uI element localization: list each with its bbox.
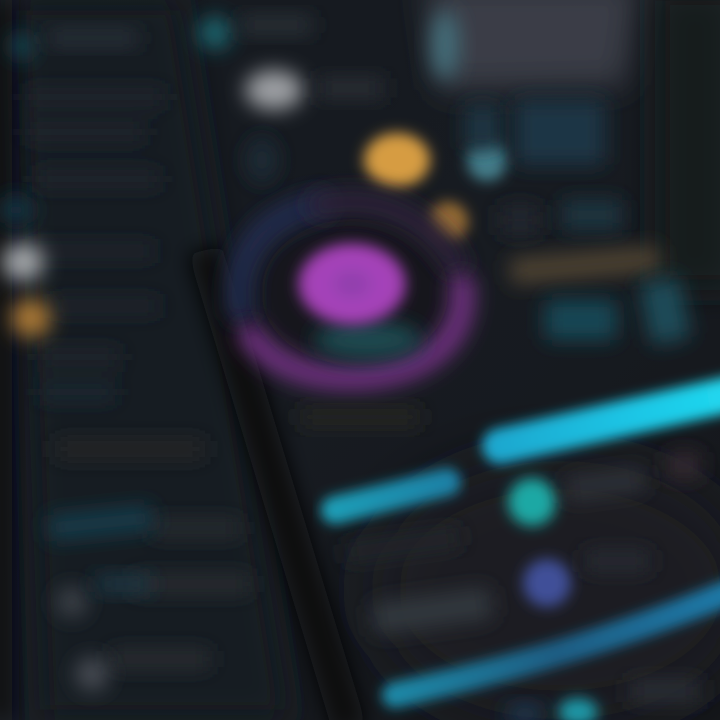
icon: teal small mark [0, 196, 34, 224]
icon: teal bottom dot [558, 698, 598, 720]
panel: left column [0, 0, 290, 720]
icon: teal dot header [10, 34, 34, 58]
icon: gray dot lower left [56, 586, 88, 618]
cyan highlight bar [500, 392, 720, 446]
panel: top right gray [425, 0, 640, 90]
top header items [199, 10, 459, 184]
teal bar lower left [47, 505, 154, 541]
divider: dark diagonal strip [205, 250, 350, 720]
donut left arc [239, 205, 320, 310]
icon: orange dot [11, 299, 51, 337]
blue bottom bar [395, 588, 720, 695]
label bar beside blue circle [585, 550, 650, 572]
label bar beside teal circle [564, 467, 646, 501]
left text bars [25, 90, 250, 668]
icon: teal dot top [199, 17, 231, 49]
panel: top right dark edge [655, 0, 720, 290]
white label [245, 70, 303, 110]
icon: blue circle [523, 559, 571, 607]
gray label [318, 78, 383, 98]
blue bottom mark [505, 705, 545, 720]
panel: lower right [370, 460, 720, 720]
panel: teal stats right [465, 100, 622, 235]
donut top arc [320, 201, 455, 262]
icon: gray dot bottom left [75, 657, 109, 691]
teal bar [335, 482, 447, 510]
icon: white dot [2, 243, 44, 281]
teal stat marker [246, 136, 278, 184]
donut purple arc [250, 285, 463, 378]
gray bottom label [630, 680, 700, 702]
gray text bar [370, 587, 494, 635]
dim label bar [300, 408, 420, 426]
icon: teal circle [508, 478, 556, 526]
icon: reddish mark [668, 452, 700, 478]
left heading bar [48, 30, 138, 46]
teal block [545, 300, 617, 340]
icon: orange circle [364, 133, 430, 187]
donut teal segment [314, 321, 422, 359]
icon: teal circle [467, 141, 507, 181]
orange label bar [509, 246, 661, 284]
teal bar middle left [95, 575, 150, 593]
icon: teal pill [431, 10, 459, 80]
teal tall block [639, 277, 691, 345]
icon: small orange circle [428, 202, 468, 242]
donut center magenta [298, 243, 406, 325]
donut chart [239, 201, 463, 378]
dim text bar [344, 527, 461, 563]
heading bar [240, 16, 312, 34]
donut dark fill [255, 212, 455, 372]
